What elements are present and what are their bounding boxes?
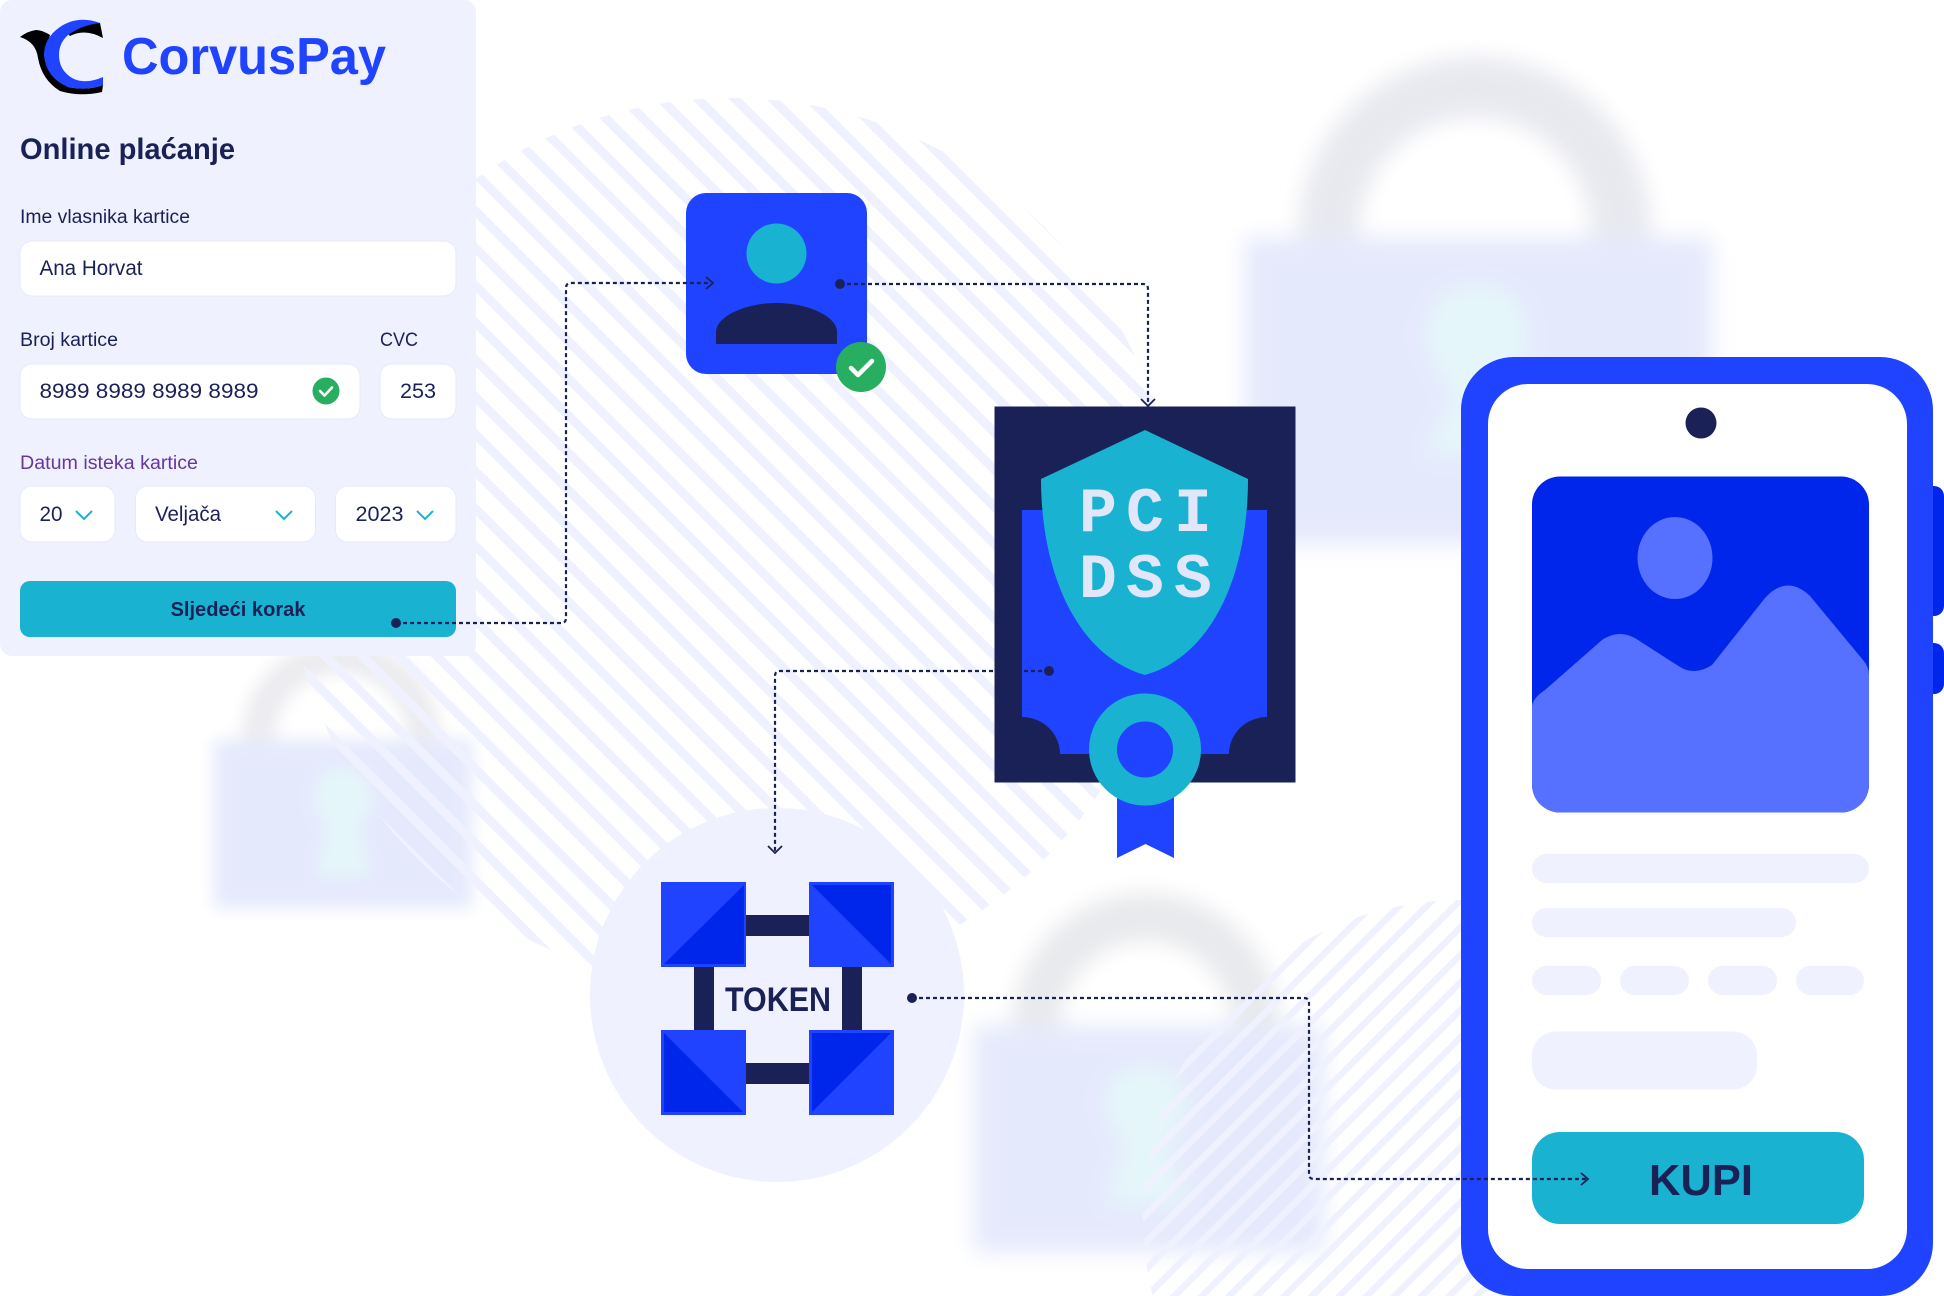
blurred padlock: bottom centre — [974, 917, 1324, 1252]
icon: valid check — [312, 378, 340, 404]
logo: CorvusPay — [20, 20, 386, 94]
token diagram — [661, 882, 894, 1115]
blurred padlock: top right — [1245, 87, 1712, 544]
logo: CorvusPay: CorvusPay — [122, 28, 386, 86]
field label: card number: Broj kartice — [20, 330, 118, 351]
node: bottom left — [661, 1030, 746, 1115]
camera — [1686, 408, 1716, 438]
input: card number: 8989 8989 8989 8989 — [40, 380, 258, 403]
striped background circle: bottom right — [1143, 900, 1779, 1296]
striped background circle: centre — [286, 98, 1176, 988]
arrow: token to buy button — [907, 993, 1588, 1185]
seal — [1103, 708, 1187, 792]
select: month: Veljača — [155, 503, 221, 526]
arrow: user to certificate — [835, 279, 1155, 406]
arrow: certificate to token — [768, 666, 1054, 853]
select: year: 2023 — [356, 503, 404, 526]
button: next step — [20, 581, 456, 637]
token circle — [590, 808, 964, 1182]
shield text: PCI: PCI — [1079, 479, 1212, 550]
field label: CVC: CVC — [380, 330, 418, 351]
icon: verified badge — [836, 342, 886, 392]
node: top right — [809, 882, 894, 967]
input: card number — [20, 364, 360, 419]
token label: TOKEN — [725, 981, 831, 1019]
select: day — [20, 486, 115, 542]
ribbon — [1117, 780, 1174, 858]
field label: expiry: Datum isteka kartice — [20, 453, 198, 474]
shield — [1041, 430, 1248, 675]
select: day: 20 — [40, 503, 62, 526]
input: name: Ana Horvat — [40, 257, 143, 280]
image placeholder — [1532, 476, 1869, 812]
blurred padlock: left — [214, 657, 472, 908]
node: top left — [661, 882, 746, 967]
panel: payment form — [0, 0, 476, 656]
shield text: DSS: DSS — [1079, 545, 1212, 616]
phone — [1461, 357, 1944, 1296]
side buttons — [1920, 486, 1944, 694]
heading: Online plaćanje — [20, 133, 235, 166]
select: month — [136, 486, 316, 542]
button: buy — [1532, 1132, 1864, 1224]
PCI DSS certificate — [994, 406, 1296, 858]
select: year — [336, 486, 456, 542]
button: next step: Sljedeći korak — [170, 599, 306, 621]
node: bottom right — [809, 1030, 894, 1115]
input: name — [20, 241, 456, 296]
arrow: form to user — [391, 277, 713, 628]
placeholder lines — [1532, 854, 1869, 1090]
icon: user card — [686, 193, 886, 392]
input: CVC — [380, 364, 456, 419]
input: CVC: 253 — [400, 380, 436, 403]
field label: name: Ime vlasnika kartice — [20, 207, 190, 228]
button: buy: KUPI — [1649, 1156, 1753, 1205]
